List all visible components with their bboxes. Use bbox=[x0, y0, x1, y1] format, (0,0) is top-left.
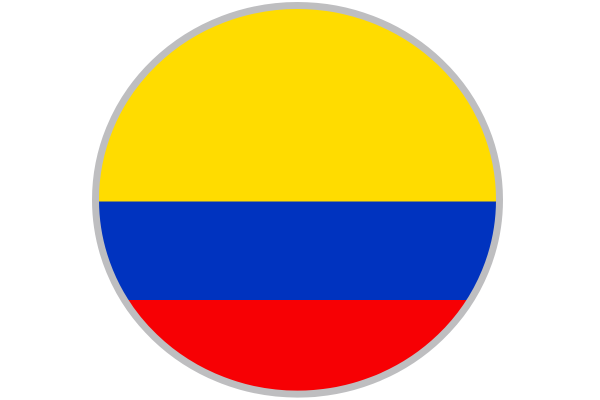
flag stripes bbox=[90, 0, 505, 400]
icon: circular Colombia flag bbox=[92, 2, 503, 398]
blue stripe bbox=[90, 202, 505, 300]
gray circular border bbox=[96, 6, 500, 394]
red stripe bbox=[128, 300, 466, 391]
yellow stripe bbox=[90, 0, 505, 202]
